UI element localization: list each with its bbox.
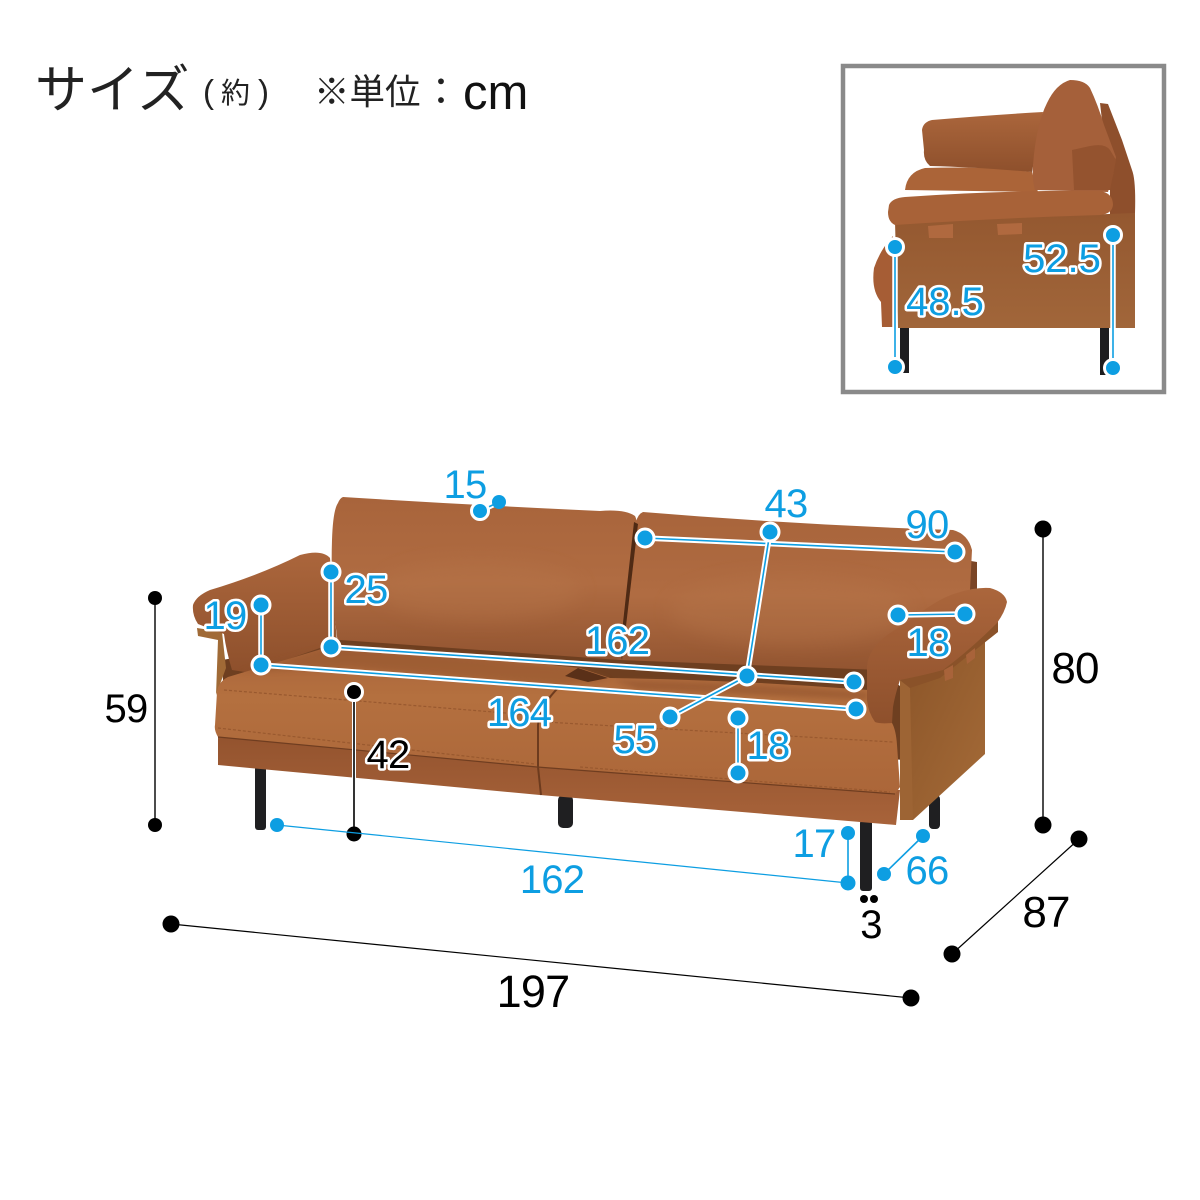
dimension 197: 197: [497, 966, 569, 1017]
seat stitching: [218, 690, 893, 792]
arm straps: [944, 648, 975, 681]
seat divider: [538, 686, 560, 795]
dimension 42: [346, 684, 409, 842]
title: ：: [422, 72, 460, 114]
dimension 55: 55: [614, 718, 656, 762]
dimension 66: 66: [906, 849, 948, 893]
sofa legs: [255, 766, 940, 891]
panel: side view inset: [843, 66, 1164, 392]
dimension 162 seat back: 162: [585, 619, 649, 663]
title: cm: [463, 66, 528, 120]
dimension 18 arm width: [889, 605, 974, 665]
shadow under back cushions: [240, 645, 610, 686]
title: ): [258, 73, 269, 110]
dimension 52.5: [1023, 226, 1122, 376]
dimension 15: [444, 463, 506, 520]
cushion highlights: [380, 560, 910, 645]
cushion gap: [620, 522, 638, 660]
dimension 66: [877, 829, 948, 893]
dimension 15: 15: [444, 463, 486, 507]
wood back frame: [960, 560, 977, 600]
dimension 17: 17: [793, 822, 835, 866]
dark underlay behind seat: [222, 640, 905, 760]
right arm: [867, 588, 1007, 723]
inset frame: [843, 66, 1164, 392]
left arm: [193, 553, 337, 672]
right wood side panel: [900, 640, 985, 820]
seat cushions: [215, 645, 900, 794]
dimension 162 leg span: [270, 818, 856, 902]
dimension 3: 3: [860, 903, 882, 947]
dimension 80: [1034, 520, 1099, 834]
dimension 80: 80: [1051, 644, 1099, 693]
title: 約: [221, 77, 250, 110]
dimension 48.5: 48.5: [906, 280, 984, 324]
dimension 43: [738, 482, 807, 685]
dimension 55: [614, 676, 747, 762]
dimension 87: 87: [1022, 888, 1070, 937]
dimension 19: [204, 594, 270, 665]
dimension 52.5: 52.5: [1023, 237, 1101, 281]
left back cushion: [332, 497, 637, 670]
dimension 90: [636, 503, 964, 561]
dimension 43: 43: [765, 482, 807, 526]
dimension 164: [252, 656, 865, 735]
dimension 25: 25: [345, 568, 387, 612]
dimension 17: [793, 822, 855, 883]
dimension 25: [322, 563, 387, 647]
dimension 59: 59: [105, 687, 147, 731]
dimension 90: 90: [906, 503, 948, 547]
title: [35, 62, 528, 120]
base: [218, 735, 900, 825]
right back cushion: [615, 512, 972, 680]
dimension 164: 164: [487, 691, 552, 735]
title: ※単位: [314, 72, 421, 112]
dimension 59: [105, 591, 162, 832]
dimension 19: 19: [204, 594, 246, 638]
dimension 42: 42: [367, 733, 409, 777]
dimension 18 arm width: 18: [907, 621, 949, 665]
dimension 87: [944, 830, 1088, 962]
dimension 162 leg span: 162: [520, 858, 584, 902]
inset sofa side photo: [873, 80, 1135, 375]
dimension 197: [162, 916, 920, 1017]
left wood frame: [197, 628, 226, 695]
dimension 18 seat thickness: [729, 709, 789, 782]
main sofa photo: [193, 497, 1007, 891]
dimension 18 seat thickness: 18: [747, 724, 789, 768]
title: サイズ: [35, 62, 189, 120]
title: (: [203, 73, 214, 110]
dimension 48.5: [886, 238, 984, 376]
dimension 162 seat back: [322, 619, 863, 691]
